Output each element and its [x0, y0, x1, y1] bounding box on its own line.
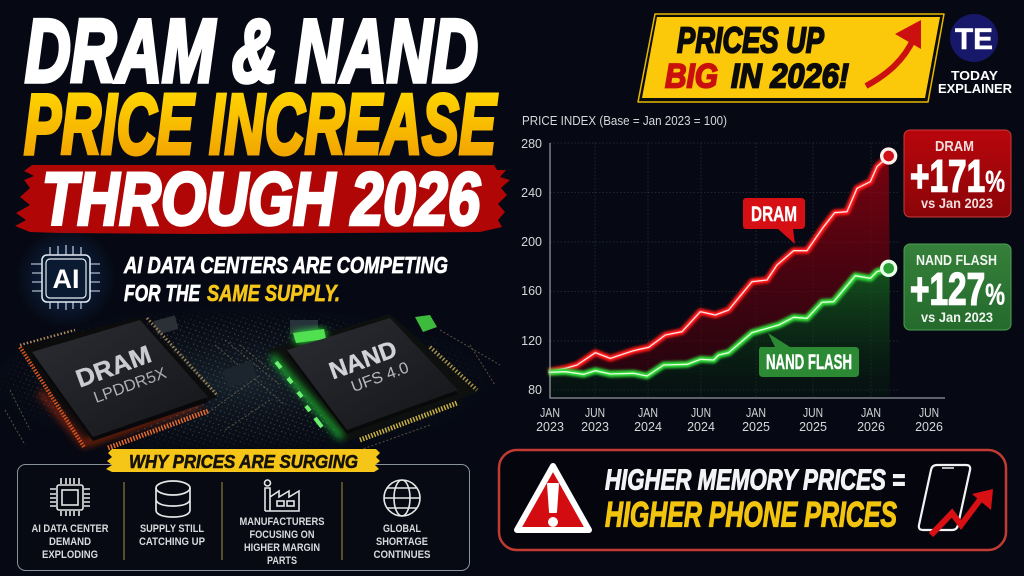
x axis labels: JAN	[746, 406, 766, 420]
chip: DRAM: LPDDR5X	[92, 365, 169, 407]
x axis labels	[536, 406, 943, 434]
y axis labels: 240	[521, 186, 542, 200]
y axis labels: 80	[528, 383, 542, 397]
x axis labels: JUN	[803, 406, 823, 420]
x axis labels: 2025	[742, 420, 770, 434]
x axis labels: JAN	[861, 406, 881, 420]
x axis labels: 2023	[536, 420, 564, 434]
icon: warning triangle	[517, 466, 589, 530]
title line: THROUGH 2026: THROUGH 2026	[42, 158, 481, 240]
reason: manufacturers focusing: MANUFACTURERS	[240, 516, 324, 528]
NAND line	[549, 268, 889, 376]
chip: NAND	[268, 314, 478, 442]
y axis labels: 200	[521, 235, 542, 249]
reason: AI data center demand: DEMAND	[49, 536, 91, 548]
text: AI data centers competing: AI DATA CENTERS ARE COMPETING	[123, 252, 448, 278]
x axis labels: 2026	[857, 420, 885, 434]
y axis labels: 280	[521, 137, 542, 151]
chart title: PRICE INDEX (Base = Jan 2023 = 100)	[522, 114, 727, 128]
reason: manufacturers focusing: HIGHER MARGIN	[244, 542, 320, 554]
text: AI data centers competing: SAME SUPPLY.	[207, 280, 340, 306]
x axis labels: JUN	[585, 406, 605, 420]
text: AI data centers competing: FOR THE	[124, 280, 201, 306]
text: higher memory prices: HIGHER MEMORY PRICES =	[605, 464, 905, 496]
chip: NAND: UFS 4.0	[349, 359, 411, 396]
badge: prices up big in 2026: BIG	[665, 58, 718, 96]
badge: prices up big in 2026: IN 2026!	[731, 58, 849, 96]
y axis labels: 120	[521, 334, 542, 348]
card: NAND flash +127%: NAND FLASH	[916, 252, 997, 269]
card: NAND flash +127%: vs Jan 2023	[921, 309, 993, 325]
red area between lines	[549, 156, 890, 376]
x axis labels: JAN	[638, 406, 658, 420]
icon: phone with red arrow	[919, 465, 993, 535]
callout: NAND flash: NAND FLASH	[766, 351, 852, 374]
reason: supply still catching up: SUPPLY STILL	[140, 523, 204, 535]
reason: global shortage: SHORTAGE	[376, 536, 428, 548]
callout: DRAM: DRAM	[751, 203, 797, 226]
reason: supply still catching up	[139, 481, 205, 548]
axes	[550, 143, 945, 398]
text: AI data centers competing	[123, 252, 448, 306]
logo: Today Explainer: TODAY	[951, 68, 998, 83]
reason: global shortage: GLOBAL	[383, 523, 421, 535]
green area under NAND line	[549, 268, 890, 397]
card: DRAM +171%: +171%	[910, 150, 1005, 202]
title	[15, 0, 510, 240]
logo: Today Explainer: TE	[955, 23, 993, 56]
x axis labels: 2023	[581, 420, 609, 434]
icon: AI chip	[16, 228, 116, 328]
reason: AI data center demand	[32, 478, 109, 561]
title line: PRICE INCREASE: PRICE INCREASE	[24, 78, 498, 172]
reason: global shortage: CONTINUES	[374, 549, 430, 561]
DRAM line	[549, 156, 889, 372]
y axis labels: 160	[521, 284, 542, 298]
x axis labels: 2024	[634, 420, 662, 434]
card: DRAM +171%: vs Jan 2023	[921, 195, 993, 211]
heading banner: why prices are surging: WHY PRICES ARE SURGING	[129, 452, 358, 472]
x axis labels: JUN	[919, 406, 939, 420]
reason: manufacturers focusing: PARTS	[267, 555, 297, 567]
reason: AI data center demand: EXPLODING	[42, 549, 98, 561]
x axis labels: 2026	[915, 420, 943, 434]
badge: prices up big in 2026	[638, 14, 944, 102]
reason: manufacturers focusing: FOCUSING ON	[250, 529, 315, 541]
panel: higher memory prices warning	[499, 450, 1006, 550]
reason: manufacturers focusing	[240, 480, 324, 567]
x axis labels: JUN	[691, 406, 711, 420]
DRAM end marker	[882, 149, 896, 163]
callout: NAND flash	[759, 333, 859, 377]
chip: DRAM	[20, 317, 217, 448]
logo: Today Explainer	[938, 14, 1013, 96]
callout: DRAM	[743, 198, 805, 244]
NAND end marker	[882, 261, 896, 275]
text: higher phone prices: HIGHER PHONE PRICES	[605, 496, 897, 534]
x axis labels: JAN	[540, 406, 560, 420]
x axis labels: 2024	[687, 420, 715, 434]
icon: red up arrow	[866, 20, 921, 86]
icon: AI chip: AI	[52, 264, 80, 294]
chart: price index	[521, 114, 945, 434]
card: DRAM +171%: DRAM	[935, 138, 974, 155]
chip: DRAM: DRAM	[72, 340, 155, 393]
chip: NAND: NAND	[326, 336, 401, 385]
badge: prices up big in 2026: PRICES UP	[677, 20, 825, 60]
panel: why prices are surging	[18, 449, 470, 570]
card: NAND flash +127%	[904, 244, 1011, 330]
reason: global shortage	[374, 480, 430, 561]
card: NAND flash +127%: +127%	[910, 264, 1005, 314]
reason: supply still catching up: CATCHING UP	[139, 536, 205, 548]
logo: Today Explainer: EXPLAINER	[938, 81, 1013, 96]
red brush band	[15, 165, 510, 234]
reason: AI data center demand: AI DATA CENTER	[32, 523, 109, 535]
y axis labels	[521, 137, 542, 397]
chip illustration: circuit board background	[0, 310, 500, 449]
card: DRAM +171%	[904, 130, 1011, 217]
x axis labels: 2025	[799, 420, 827, 434]
title line: DRAM & NAND: DRAM & NAND	[25, 0, 478, 100]
